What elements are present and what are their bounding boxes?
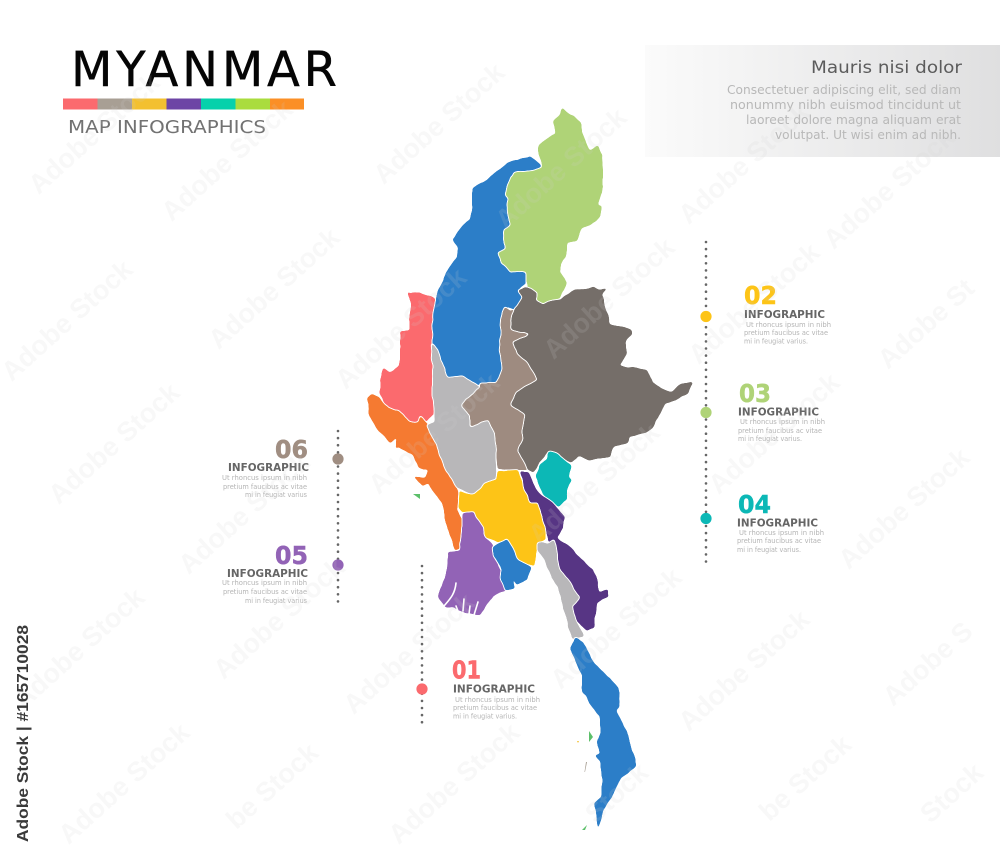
callout 03: mi in feugiat varius. [738,434,802,443]
subtitle: MAP INFOGRAPHICS [68,117,266,138]
stock watermark pattern: Adobe Stock [673,96,816,230]
callout 06: 06 [275,435,308,464]
colour bar [63,98,304,110]
stock watermark pattern: Adobe Stock [208,551,351,685]
stock watermark pattern: Adobe Stock [538,231,681,365]
callout 01 [452,656,540,720]
callout 05: pretium faucibus ac vitae [223,587,308,596]
callout 05: Ut rhoncus ipsum in nibh [222,578,307,587]
callout 02: mi in feugiat varius. [744,336,808,346]
callout 04: Ut rhoncus ipsum in nibh [739,528,824,537]
callout 06: INFOGRAPHIC [228,462,309,474]
stock id vertical label: Adobe Stock | #165710028 [15,625,32,842]
stock watermark pattern: be Stock [220,737,325,835]
marker 03 [700,407,712,418]
callout 04 [737,490,824,554]
region: Kachin [498,107,603,304]
marker 02 [700,311,712,322]
stock watermark pattern: Adobe Stock [53,716,196,850]
callout 03: Ut rhoncus ipsum in nibh [740,417,825,426]
stock watermark pattern: Adobe Stock [383,716,526,850]
panel text: nonummy nibh euismod tincidunt ut [730,97,961,112]
callout 02 [744,281,831,346]
stock watermark pattern: Adobe Stock [363,366,506,500]
stock watermark pattern: be Stock [753,729,858,827]
region: Chin [380,290,436,423]
callout 03: 03 [739,379,771,408]
timeline left [337,431,339,607]
region: Mon [537,540,584,640]
stock watermark pattern: Adobe Stock [330,261,473,395]
panel text [727,82,961,142]
callout 05 [222,541,308,605]
callout 03: INFOGRAPHIC [738,406,819,418]
map of Myanmar [367,107,692,830]
callout 06: mi in feugiat varius [245,490,307,499]
stock watermark pattern: Adobe Stock [683,236,826,370]
title: MYANMAR [71,42,337,98]
timeline bottom [421,566,423,725]
panel text: Consectetuer adipiscing elit, sed diam [727,82,961,97]
panel heading: Mauris nisi dolor [811,58,962,78]
callout 02: 02 [744,281,777,310]
callout 06: Ut rhoncus ipsum in nibh [222,473,307,482]
stock watermark pattern: Adobe Stock [203,221,346,355]
region: Magway [427,342,497,495]
marker 06 [332,453,344,465]
stock watermark pattern: Adobe St [872,273,980,374]
panel text: laoreet dolore magna aliquam erat [746,112,961,127]
marker 05 [332,559,344,571]
timeline right [705,242,707,562]
stock watermark pattern: Adobe Stock [8,581,151,715]
region: Rakhine [367,394,462,550]
stock watermark pattern: Adobe Stock [523,416,666,550]
region: Tanintharyi [570,638,636,830]
stock watermark pattern: Adobe Stock [338,586,481,720]
stock watermark pattern: Adobe Stock [490,101,633,235]
stock watermark pattern: Adobe Stock [703,366,846,500]
panel: description [645,45,1000,157]
callout 01: mi in feugiat varius. [453,712,517,720]
callout 05: 05 [275,541,308,570]
stock watermark pattern: Adobe Stock [545,561,688,695]
stock watermark pattern: Adobe Stock [156,93,299,227]
region: Kayah [535,452,572,507]
callout 05: mi in feugiat varius [245,596,307,605]
stock watermark pattern: Stock [914,757,990,829]
marker 04 [700,513,712,524]
stock watermark pattern: Adobe Stock [173,446,316,580]
callout 01: 01 [452,656,481,684]
islands [413,494,593,830]
callout 04: mi in feugiat varius. [737,545,801,554]
callout 01: INFOGRAPHIC [453,684,535,696]
region: Bago [458,470,547,567]
marker 01 [416,683,428,695]
region: Kayin [520,471,608,631]
stock watermark pattern: Adobe S [877,616,978,711]
callout 05: INFOGRAPHIC [227,568,308,580]
region: Sagaing [431,156,542,385]
stock watermark pattern: Adobe Stock [23,66,166,200]
callout 03 [738,379,825,443]
callout 01: pretium faucibus ac vitae [453,703,538,712]
stock watermark pattern: Adobe Stock [673,603,816,737]
callout 03: pretium faucibus ac vitae [738,426,823,435]
callout 02: Ut rhoncus ipsum in nibh [746,320,831,329]
region: Yangon [493,538,532,590]
callout 06: pretium faucibus ac vitae [223,482,308,491]
region: Mandalay [462,307,537,470]
callout 04: 04 [738,490,771,519]
panel text: volutpat. Ut wisi enim ad nibh. [775,127,961,142]
stock watermark pattern: Adobe Stock [43,376,186,510]
callout 02: pretium faucibus ac vitae [744,328,829,337]
stock watermark pattern: Stock [579,757,655,829]
callout 04: INFOGRAPHIC [737,518,818,530]
callout 02: INFOGRAPHIC [744,309,825,321]
stock watermark pattern: Adobe Stock [368,56,511,190]
callout 06 [222,435,309,499]
stock watermark pattern: Adobe Stock [833,441,976,575]
stock watermark pattern: Adobe Stock [818,121,961,255]
region: Shan [510,287,692,473]
region: Ayeyarwady [438,512,506,616]
callout 04: pretium faucibus ac vitae [737,536,822,545]
callout 01: Ut rhoncus ipsum in nibh [455,695,540,704]
